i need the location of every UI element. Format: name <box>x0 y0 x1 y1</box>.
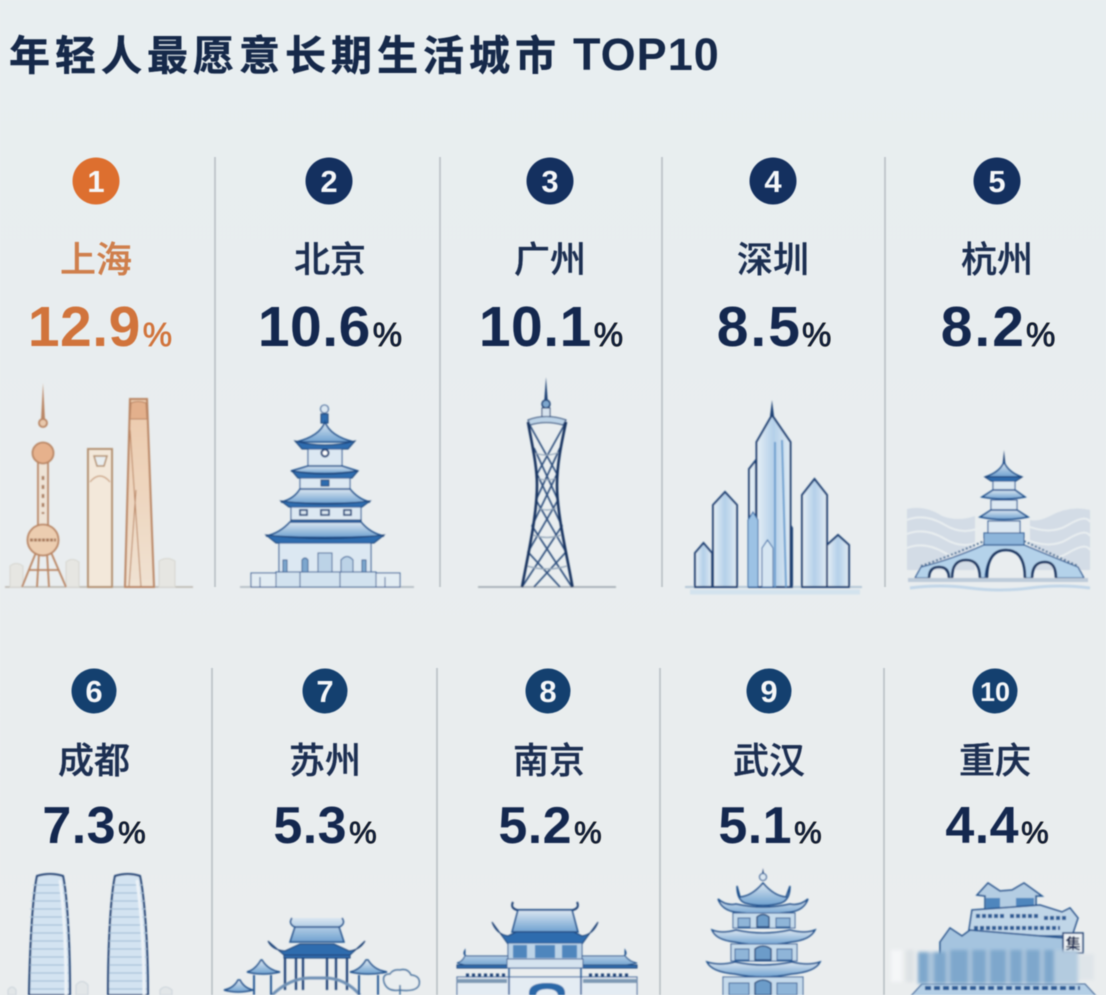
rank badge 8 <box>526 668 570 714</box>
rank badge 3 <box>526 158 574 204</box>
rank badge 8: 8 <box>539 674 557 709</box>
rank badge 2: 2 <box>320 164 338 199</box>
panel: rank 9 Wuhan <box>707 668 822 995</box>
sign on building: 集 <box>1065 935 1081 953</box>
percent: 8.2%: 8.2% <box>941 295 1055 359</box>
rank badge 6 <box>72 668 116 714</box>
illustration: Canton Tower <box>478 377 616 587</box>
panel: rank 4 Shenzhen <box>685 158 862 592</box>
city name: Suzhou: 苏州 <box>289 740 361 781</box>
percent: 10.6%: 10.6% <box>258 295 402 359</box>
rank badge 2 <box>306 158 352 204</box>
panel: rank 3 Guangzhou <box>478 158 623 587</box>
percent: 10.1%: 10.1% <box>479 295 623 359</box>
panel: rank 5 Hangzhou <box>907 158 1090 590</box>
panel: rank 6 Chengdu <box>8 668 172 995</box>
rank badge 7 <box>302 668 348 714</box>
rank badge 5: 5 <box>988 164 1006 199</box>
city name: Shenzhen: 深圳 <box>737 239 809 280</box>
city name: Beijing: 北京 <box>294 239 366 280</box>
city name: Wuhan: 武汉 <box>733 740 805 781</box>
panel: rank 2 Beijing <box>240 158 414 587</box>
city name: Guangzhou: 广州 <box>514 239 586 280</box>
rank badge 9 <box>746 668 792 714</box>
percent: 8.5%: 8.5% <box>717 295 831 359</box>
panel: rank 10 Chongqing <box>910 668 1097 995</box>
illustration: Hongyadong stilt buildings <box>910 883 1097 995</box>
illustration: Temple pagoda <box>240 405 414 587</box>
illustration: Shenzhen skyscrapers <box>685 400 862 592</box>
city name: Chengdu: 成都 <box>58 740 130 781</box>
rank badge 10: 10 <box>980 677 1010 707</box>
city name: Shanghai: 上海 <box>60 239 132 280</box>
percent: 7.3%: 7.3% <box>42 797 146 855</box>
rank badge 9: 9 <box>760 674 778 709</box>
panel: rank 7 Suzhou <box>224 668 419 995</box>
city name: Nanjing: 南京 <box>513 740 585 781</box>
rank badge 3: 3 <box>541 164 559 199</box>
illustration: Chengdu twin towers <box>8 874 172 995</box>
illustration: Nanjing city gate <box>457 902 637 995</box>
illustration: Shanghai skyline <box>5 383 193 587</box>
percent: 5.1%: 5.1% <box>718 797 822 855</box>
rank badge 10 <box>972 668 1018 714</box>
percent: 5.3%: 5.3% <box>273 797 377 855</box>
rank badge 6: 6 <box>85 674 103 709</box>
rank badge 4: 4 <box>764 164 782 199</box>
city name: Chongqing: 重庆 <box>959 740 1031 781</box>
percent: 5.2%: 5.2% <box>498 797 602 855</box>
title: TOP10 <box>573 29 720 80</box>
rank badge 1 <box>72 158 120 204</box>
panel: rank 8 Nanjing <box>457 668 637 995</box>
panel: rank 1 Shanghai <box>5 158 193 587</box>
watermark smear <box>891 950 1094 984</box>
percent: 4.4%: 4.4% <box>945 797 1049 855</box>
illustration: Suzhou garden pavilions <box>224 918 419 995</box>
title: 年轻人最愿意长期生活城市 <box>9 33 561 79</box>
rank badge 7: 7 <box>316 674 334 709</box>
illustration: Yellow Crane Tower <box>707 868 820 995</box>
rank badge 5 <box>974 158 1020 204</box>
rank badge 4 <box>750 158 796 204</box>
percent: 12.9%: 12.9% <box>28 295 172 359</box>
rank badge 1: 1 <box>87 164 105 199</box>
city name: Hangzhou: 杭州 <box>961 239 1033 280</box>
illustration: West Lake pagoda and bridge <box>907 450 1090 590</box>
